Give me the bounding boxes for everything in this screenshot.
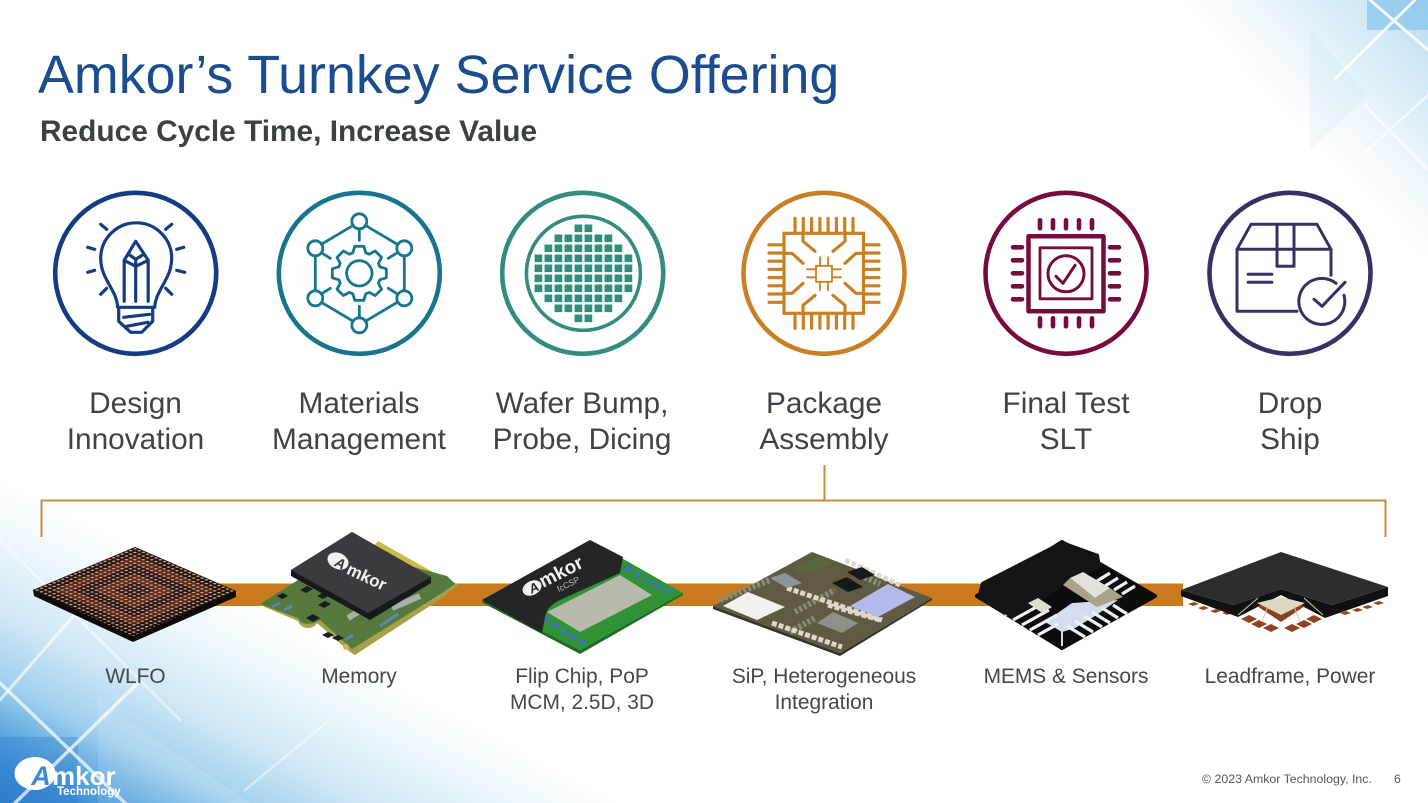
logo: Amkor Technology: A: [30, 761, 51, 791]
label: Package Assembly: Assembly: [759, 423, 889, 456]
subtitle: Reduce Cycle Time, Increase Value: [40, 115, 537, 148]
step: Design Innovation: [55, 193, 216, 456]
bracket linking Package Assembly to package types: [42, 465, 1386, 537]
label: SiP, Heterogeneous Integration: SiP, Heterogeneous: [732, 665, 916, 688]
footer: page number: 6: [1394, 772, 1401, 786]
step: Final Test SLT: [986, 193, 1146, 456]
logo: Amkor Technology: [14, 757, 121, 798]
label: Memory: Memory: [321, 665, 397, 688]
label: Final Test SLT: Final Test: [1003, 387, 1130, 420]
Amkor logo on module: A: [331, 553, 348, 573]
step: Drop Ship: [1210, 193, 1370, 456]
icon: tested chip with check: [986, 193, 1146, 354]
Amkor logo on module: mkor: [344, 560, 390, 595]
step: Package Assembly: [744, 193, 904, 456]
icon: box with check: [1210, 193, 1370, 354]
label: Leadframe, Power: Leadframe, Power: [1205, 665, 1375, 688]
label: SiP, Heterogeneous Integration: Integration: [775, 691, 873, 714]
icon: wafer: [502, 193, 663, 354]
label: Materials Management: Management: [272, 423, 447, 456]
chip: WLFO: [33, 547, 236, 642]
Amkor fcCSP logo on lid: A: [525, 579, 541, 597]
label: Drop Ship: Ship: [1260, 423, 1320, 456]
icon: gear in network: [279, 193, 440, 354]
label: Materials Management: Materials: [299, 387, 419, 420]
step: Materials Management: [272, 193, 447, 456]
title: Amkor’s Turnkey Service Offering: [38, 45, 839, 105]
chip: MEMS and Sensors: [977, 542, 1155, 648]
Amkor fcCSP logo on lid: mkor: [536, 552, 587, 592]
chip: Flip Chip: [482, 540, 683, 654]
label: MEMS and Sensors: MEMS & Sensors: [984, 665, 1148, 688]
chip: Memory module: [260, 532, 458, 655]
Amkor logo on module: [323, 549, 390, 595]
chip: SiP Heterogeneous Integration: [713, 552, 932, 656]
label: Design Innovation: Design: [89, 387, 182, 420]
footer: copyright: © 2023 Amkor Technology, Inc.: [1202, 772, 1372, 786]
label: Flip Chip, PoP, MCM, 2.5D, 3D: Flip Chip, PoP: [515, 665, 649, 688]
label: Drop Ship: Drop: [1258, 387, 1322, 420]
orange connecting band: [215, 584, 1183, 606]
icon: package with lead pins: [744, 193, 904, 354]
label: Final Test SLT: SLT: [1040, 423, 1092, 456]
label: Flip Chip, PoP, MCM, 2.5D, 3D: MCM, 2.5D, 3D: [510, 691, 654, 714]
label: Design Innovation: Innovation: [67, 423, 204, 456]
icon: light bulb with pencil: [55, 193, 216, 354]
label: WLFO: WLFO: [105, 665, 166, 688]
logo: Amkor Technology: Technology: [57, 786, 121, 798]
Amkor fcCSP logo on lid: fcCSP: [555, 574, 582, 594]
label: Wafer Bump, Probe, Dicing: Probe, Dicing: [493, 423, 671, 456]
Amkor fcCSP logo on lid: [518, 552, 591, 609]
step: Wafer Bump, Probe, Dicing: [493, 193, 671, 456]
label: Wafer Bump, Probe, Dicing: Wafer Bump,: [496, 387, 668, 420]
chip: Leadframe Power: [1181, 552, 1388, 632]
logo: Amkor Technology: mkor: [52, 761, 116, 791]
label: Package Assembly: Package: [766, 387, 882, 420]
